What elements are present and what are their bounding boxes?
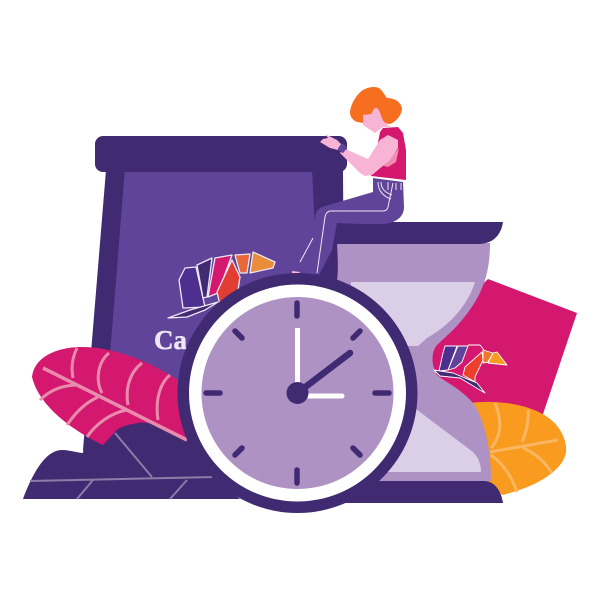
watch [337, 143, 348, 154]
dark leaf [23, 423, 240, 499]
clock hands [295, 328, 300, 393]
pink leaf [32, 347, 188, 445]
face [363, 106, 390, 133]
feet [311, 276, 318, 286]
sleeve shadow [381, 148, 399, 167]
orange leaf [470, 402, 566, 495]
shirt [371, 127, 406, 180]
hourglass [330, 222, 503, 503]
tick marks [206, 303, 389, 483]
clock [178, 273, 418, 513]
hair [350, 87, 402, 124]
leg seam [300, 183, 393, 273]
bag logo: bear [168, 252, 275, 318]
person [279, 87, 406, 303]
hourglass logo: bear [434, 345, 507, 393]
hand [320, 134, 342, 150]
pocket and belt fringe [378, 182, 401, 199]
bag [83, 136, 347, 480]
legs [297, 178, 404, 277]
bag logo text: Ca [154, 325, 187, 355]
pink square card [425, 279, 577, 420]
arm [340, 135, 398, 176]
